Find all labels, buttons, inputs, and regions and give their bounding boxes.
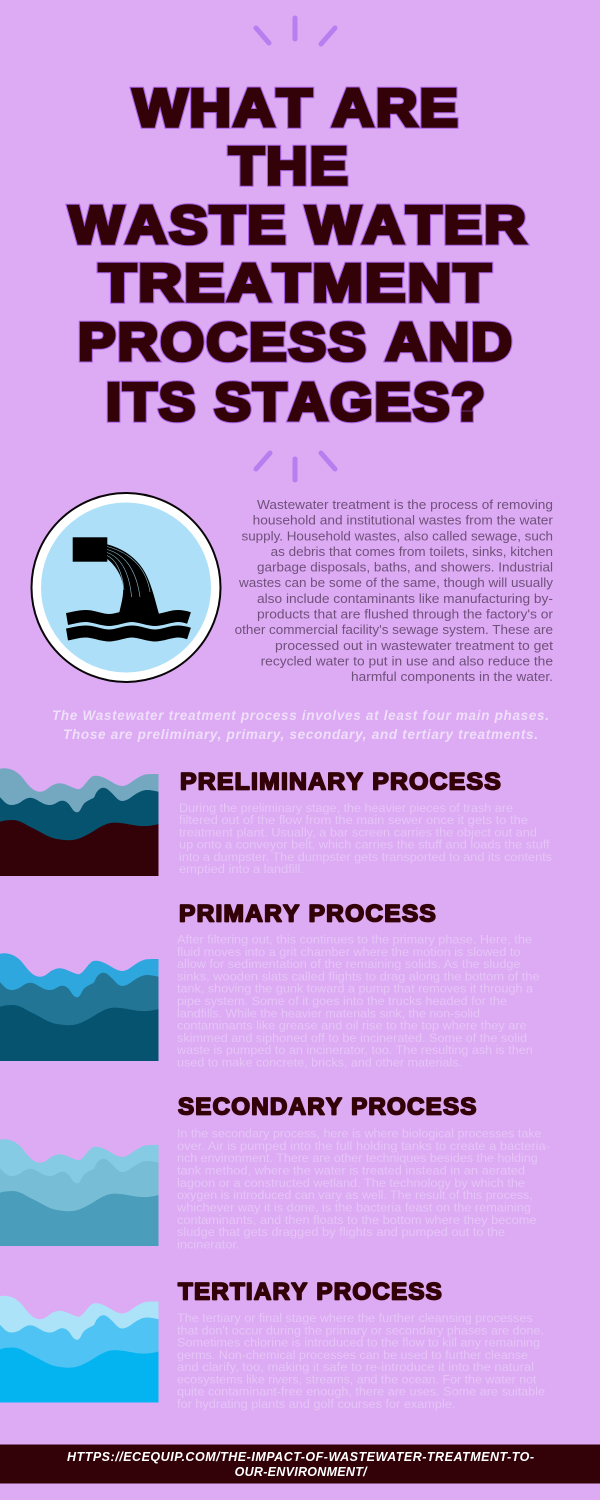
body text: primary process: fluid moves into a grit chamber where the motion is slowed to	[177, 945, 521, 959]
body text: preliminary process: emptied into a landfill.	[179, 862, 304, 876]
body text: primary process: After filtering out, this continues to the primary phase. Here, the	[177, 932, 532, 946]
icon: bottom sunburst accent	[256, 453, 335, 480]
icon: sewage pipe badge	[32, 493, 220, 682]
heading: preliminary process: PRELIMINARY PROCESS	[180, 768, 502, 795]
body text: primary process: allow for sedimentation of the remaining solids. As the sludge	[177, 957, 521, 971]
wave graphic: preliminary	[0, 768, 158, 876]
body text: secondary process: over. Air is pumped into the full holding tanks to create a bacteria-	[177, 1139, 550, 1153]
intro paragraph: processed out in wastewater treatment to get	[275, 638, 553, 653]
body text: secondary process: sludge that gets dragged by flights and pumped out to the	[177, 1225, 505, 1239]
title: THE	[229, 137, 350, 196]
body text: secondary process: oxygen is introduced can vary as well. The result of this process,	[177, 1188, 533, 1202]
heading: tertiary process: TERTIARY PROCESS	[178, 1278, 443, 1305]
title: TREATMENT	[99, 254, 493, 313]
body text: secondary process: whichever way it is done, is the bacteria feast on the remaining	[176, 1200, 531, 1214]
body text: preliminary process	[179, 801, 552, 876]
body text: secondary process: contaminants, and then floats to the bottom where they become	[177, 1213, 537, 1227]
body text: primary process: sinks, wooden slats called flights to drag along the bottom of the	[177, 969, 540, 983]
body text: secondary process	[176, 1126, 550, 1252]
panel: secondary process	[0, 1093, 550, 1252]
body text: tertiary process: The tertiary or final stage where the further cleansing processes	[177, 1311, 533, 1325]
intro paragraph: wastes can be some of the same, though will usually	[238, 575, 554, 590]
body text: tertiary process: and clarify, too, making it safe to re-introduce it into the natural	[177, 1360, 534, 1374]
body text: tertiary process: ecosystems like rivers, streams, and the ocean. For the water not	[177, 1372, 537, 1386]
body text: preliminary process: into a dumpster. The dumpster gets transported to and its contents	[179, 850, 552, 864]
body text: secondary process: rich environment. There are other techniques besides the holding	[177, 1151, 538, 1165]
body text: primary process: landfills. While the heavier materials sink, the non-solid	[177, 1006, 480, 1020]
body text: tertiary process: for hydrating plants and golf courses for example.	[177, 1397, 455, 1411]
panel: tertiary process	[0, 1278, 545, 1411]
body text: preliminary process: treatment plant. Usually, a bar screen carries the object out and	[179, 825, 537, 839]
wave graphic: tertiary	[0, 1296, 158, 1402]
intro paragraph: Wastewater treatment is the process of removing	[257, 497, 553, 512]
intro paragraph: garbage disposals, baths, and showers. Industrial	[257, 560, 553, 575]
title: WHAT ARE	[133, 79, 460, 138]
body text: primary process: waste is pumped to an incinerator, too. The resulting ash is then	[176, 1043, 533, 1057]
intro paragraph: also include contaminants like manufacturing by-	[257, 591, 553, 606]
body text: tertiary process: quite contaminant-free enough, there are uses. Some are suitable	[177, 1385, 545, 1399]
title: PROCESS AND	[78, 313, 514, 372]
intro paragraph: recycled water to put in use and also reduce the	[261, 653, 553, 668]
intro paragraph: harmful components in the water.	[351, 669, 553, 684]
lead-in statement: Those are preliminary, primary, secondary, and tertiary treatments.	[63, 727, 538, 742]
body text: primary process: pipe system. Some of it goes into the trucks headed for the	[177, 994, 507, 1008]
intro paragraph: household and institutional wastes from the water	[253, 513, 554, 528]
body text: tertiary process: that don't occur during the primary or secondary phases are done.	[177, 1323, 544, 1337]
wave graphic: secondary	[0, 1139, 158, 1246]
intro paragraph: products that are flushed through the factory's or	[257, 606, 554, 622]
title: WHAT ARE	[133, 79, 460, 138]
body text: secondary process: incinerator.	[177, 1238, 240, 1252]
title: WASTE WATER	[69, 196, 528, 255]
body text: primary process: skimmed and siphoned off to be incinerated. Some of the solid	[177, 1031, 527, 1045]
title	[69, 79, 528, 432]
panel: preliminary process	[0, 768, 552, 876]
title: ITS STAGES?	[106, 373, 487, 432]
lead-in statement	[52, 708, 549, 742]
intro paragraph: as debris that comes from toilets, sinks, kitchen	[271, 544, 553, 559]
wave graphic: primary	[0, 953, 158, 1061]
footer source link bar: HTTPS://ECEQUIP.COM/THE-IMPACT-OF-WASTEWATER-TREATMENT-TO-	[67, 1450, 534, 1464]
intro paragraph	[235, 497, 554, 684]
body text: tertiary process	[177, 1311, 545, 1411]
title: PROCESS AND	[78, 313, 514, 372]
intro paragraph: other commercial facility's sewage system. These are	[235, 622, 553, 637]
body text: primary process: contaminants like grease and oil rise to the top where they are	[177, 1019, 527, 1033]
heading: primary process: PRIMARY PROCESS	[179, 900, 437, 927]
title: TREATMENT	[99, 254, 493, 313]
body text: secondary process: tank method, where the water is treated instead in an aerated	[177, 1164, 525, 1178]
body text: tertiary process: Sometimes chlorine is introduced to the flow to kill any remaining	[177, 1336, 540, 1350]
body text: tertiary process: germs. Non-chemical processes can be used to further cleanse	[177, 1348, 528, 1362]
body text: preliminary process: During the preliminary stage, the heavier pieces of trash are	[179, 801, 513, 815]
footer source link bar: OUR-ENVIRONMENT/	[235, 1465, 368, 1479]
title: THE	[229, 137, 350, 196]
icon: top sunburst accent	[256, 18, 335, 44]
lead-in statement: The Wastewater treatment process involves at least four main phases.	[52, 708, 549, 723]
body text: preliminary process: filtered out of the flow from the main sewer once it gets to the	[179, 813, 528, 827]
heading: secondary process: SECONDARY PROCESS	[178, 1093, 478, 1120]
body text: primary process	[176, 932, 540, 1070]
body text: preliminary process: up onto a conveyor belt, which carries the stuff and loads the stuff	[179, 838, 550, 852]
body text: secondary process: lagoon or a constructed wetland. The technology by which the	[177, 1176, 525, 1190]
intro paragraph: supply. Household wastes, also called sewage, such	[242, 528, 553, 543]
title: ITS STAGES?	[106, 373, 487, 432]
body text: primary process: tank, shoving the gunk toward a pump that removes it through a	[177, 982, 533, 996]
title: WASTE WATER	[69, 196, 528, 255]
body text: primary process: used to make concrete, bricks, and other materials.	[177, 1056, 462, 1070]
body text: secondary process: In the secondary process, here is where biological processes take	[177, 1126, 542, 1140]
footer source link bar	[0, 1444, 600, 1484]
panel: primary process	[0, 900, 540, 1070]
